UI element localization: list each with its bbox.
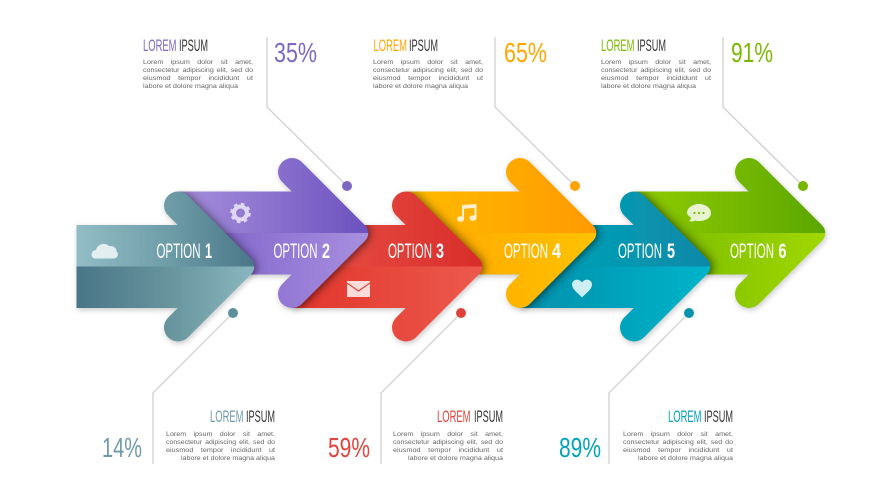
text block: option 2: labore et dolore magna aliqua — [143, 83, 238, 90]
leader line: option 3 — [381, 308, 466, 464]
text block: option 6: consectetur adipiscing elit, sed do — [601, 67, 711, 74]
leader line: option 2 — [267, 37, 352, 191]
text block: option 5: eiusmod tempor incididunt ut — [623, 447, 733, 454]
text block: option 4: Lorem ipsum dolor sit amet, — [373, 59, 483, 66]
arrow: option 2 — [176, 158, 371, 312]
percentage: 59%: 59% — [328, 432, 370, 463]
leader line: option 1 — [153, 308, 238, 464]
text block: option 1: IPSUM — [246, 407, 275, 426]
text block: option 3: LOREM — [437, 407, 470, 426]
label: option 6: OPTION — [730, 240, 774, 263]
label: option 1: 1 — [205, 240, 212, 263]
label: option 4: OPTION — [504, 240, 548, 263]
text block: option 3 — [393, 407, 503, 462]
text block: option 6: IPSUM — [637, 36, 666, 55]
text block: option 2: LOREM — [143, 36, 176, 55]
text block: option 2: eiusmod tempor incididunt ut — [143, 75, 253, 82]
leader line: option 4 — [495, 37, 580, 191]
text block: option 6 — [601, 36, 711, 90]
percentage: 65%: 65% — [504, 37, 547, 68]
text block: option 6: LOREM — [601, 36, 634, 55]
text block: option 2: consectetur adipiscing elit, sed do — [143, 67, 253, 74]
percentage: 91%: 91% — [731, 37, 773, 68]
text block: option 4: labore et dolore magna aliqua — [373, 83, 468, 90]
text block: option 2: Lorem ipsum dolor sit amet, — [143, 59, 253, 66]
text block: option 3: eiusmod tempor incididunt ut — [393, 447, 503, 454]
label: option 5: 5 — [667, 240, 675, 263]
text block: option 2: IPSUM — [179, 36, 208, 55]
text block: option 4 — [373, 36, 483, 90]
text block: option 5: consectetur adipiscing elit, sed do — [623, 439, 733, 446]
arrow: option 3 — [290, 191, 486, 346]
text block: option 4: eiusmod tempor incididunt ut — [373, 75, 483, 82]
text block: option 5: IPSUM — [704, 407, 733, 426]
percentage: 35%: 35% — [274, 37, 317, 68]
text block: option 1: consectetur adipiscing elit, sed do — [166, 439, 275, 446]
text block: option 4: consectetur adipiscing elit, sed do — [373, 67, 483, 74]
text block: option 1: eiusmod tempor incididunt ut — [166, 447, 275, 454]
label: option 3: OPTION — [388, 240, 432, 263]
leader line: option 5 — [609, 308, 694, 464]
arrow: option 5 — [518, 191, 713, 346]
label: option 6: 6 — [778, 240, 786, 263]
label: option 5: OPTION — [618, 240, 662, 263]
text block: option 3: consectetur adipiscing elit, sed do — [393, 439, 503, 446]
label: option 4: 4 — [552, 240, 561, 263]
text block: option 1: labore et dolore magna aliqua — [181, 455, 275, 462]
text block: option 1 — [166, 407, 275, 462]
text block: option 3: Lorem ipsum dolor sit amet, — [393, 431, 503, 438]
text block: option 6: Lorem ipsum dolor sit amet, — [601, 59, 711, 66]
label: option 3: 3 — [436, 240, 444, 263]
label: option 2: 2 — [322, 240, 330, 263]
arrow: option 1 — [76, 191, 254, 342]
leader line: option 6 — [723, 37, 808, 191]
label: option 3 — [388, 240, 444, 263]
percentage: 14%: 14% — [102, 432, 142, 463]
label: option 1 — [156, 240, 212, 263]
icon: envelope — [347, 281, 370, 297]
icon: heart — [572, 280, 592, 298]
icon: chat bubble — [687, 204, 711, 222]
percentage: 89%: 89% — [559, 432, 601, 463]
icon: gear — [232, 204, 250, 222]
text block: option 1: Lorem ipsum dolor sit amet, — [166, 431, 275, 438]
text block: option 4: LOREM — [374, 36, 407, 55]
label: option 2: OPTION — [274, 240, 318, 263]
text block: option 3: labore et dolore magna aliqua — [408, 455, 503, 462]
text block: option 4: IPSUM — [409, 36, 438, 55]
text block: option 6: eiusmod tempor incididunt ut — [601, 75, 711, 82]
text block: option 5: labore et dolore magna aliqua — [638, 455, 733, 462]
text block: option 5: Lorem ipsum dolor sit amet, — [623, 431, 733, 438]
text block: option 5: LOREM — [668, 407, 702, 426]
text block: option 5 — [623, 407, 733, 462]
text block: option 1: LOREM — [210, 407, 244, 426]
icon: cloud — [92, 244, 118, 258]
text block: option 6: labore et dolore magna aliqua — [601, 83, 696, 90]
text block: option 3: IPSUM — [474, 407, 503, 426]
text block: option 2 — [143, 36, 253, 90]
label: option 1: OPTION — [156, 240, 200, 263]
arrow: option 6 — [635, 158, 829, 312]
icon: music note — [457, 204, 476, 222]
arrow: option 4 — [404, 158, 598, 312]
